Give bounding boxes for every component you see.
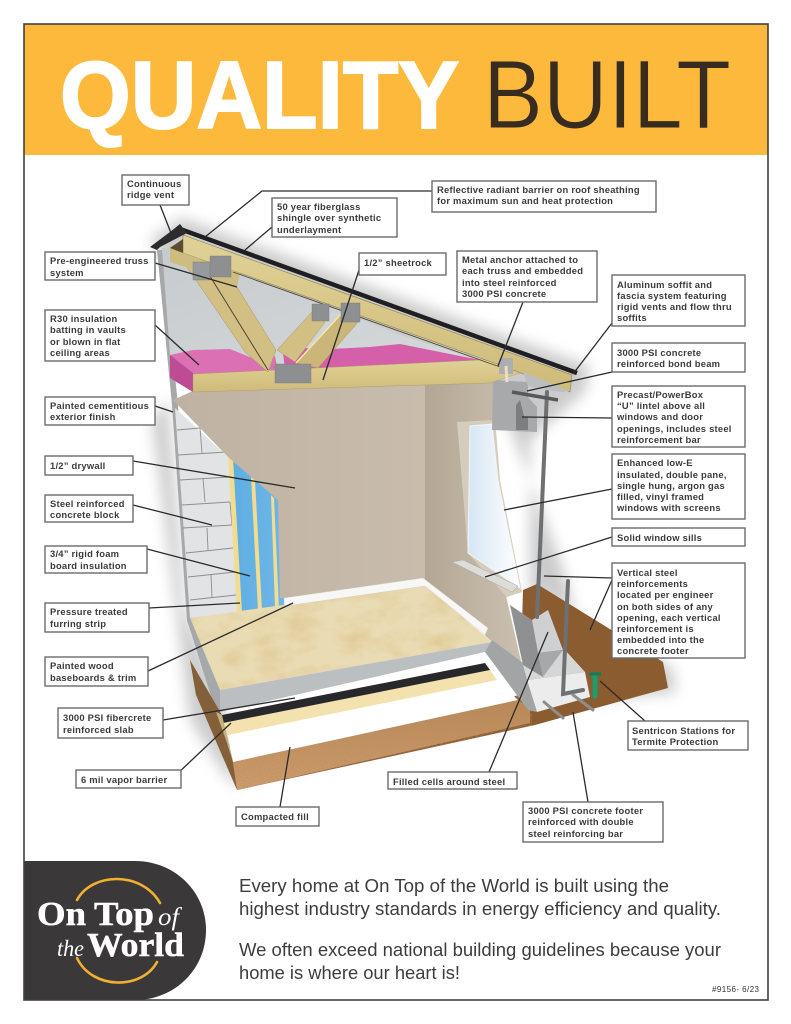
callout: vertical steel: reinforcements bbox=[617, 578, 688, 589]
callout: soffit: rigid vents and flow thru bbox=[617, 301, 732, 312]
callout: bond beam: reinforced bond beam bbox=[617, 358, 720, 369]
callout: shingle: 50 year fiberglass bbox=[277, 201, 361, 212]
ground right bbox=[233, 584, 668, 790]
cream layer bbox=[223, 670, 497, 735]
callout: bond beam bbox=[612, 343, 745, 372]
callout: baseboards: Painted wood bbox=[50, 660, 114, 671]
callout: shingle: shingle over synthetic bbox=[277, 212, 381, 223]
callout: foam bbox=[45, 546, 147, 573]
callout: sheetrock: 1/2” sheetrock bbox=[364, 257, 433, 268]
form number: #9156- 6/23 bbox=[712, 985, 760, 994]
callout: termite: Sentricon Stations for bbox=[632, 725, 735, 736]
callout: shingle bbox=[272, 198, 397, 237]
callout: vapor barrier: 6 mil vapor barrier bbox=[81, 774, 167, 785]
callout: lintel: “U” lintel above all bbox=[617, 400, 705, 411]
callout: lintel: reinforcement bar bbox=[617, 434, 701, 445]
roof shingle line bbox=[180, 229, 577, 373]
metal anchor bbox=[499, 358, 513, 382]
callout: soffit: soffits bbox=[617, 312, 647, 323]
callout: furring bbox=[45, 603, 149, 632]
compacted sand face bbox=[233, 700, 530, 790]
back wall drywall bbox=[173, 383, 428, 598]
callout: drywall bbox=[45, 456, 133, 475]
callout: r30 bbox=[45, 310, 155, 361]
callout: ridge vent: Continuous bbox=[127, 178, 181, 189]
rebar rods bbox=[537, 392, 593, 718]
u lintel bbox=[492, 380, 558, 432]
callout: furring: furring strip bbox=[50, 618, 106, 629]
callout: soffit bbox=[612, 275, 745, 326]
footer block bbox=[485, 597, 590, 712]
callout: cementitious bbox=[45, 397, 155, 425]
vapor barrier bbox=[222, 663, 490, 723]
truss plates bbox=[193, 256, 360, 383]
callout: baseboards bbox=[45, 657, 148, 686]
callout: footer: reinforced with double bbox=[528, 816, 634, 827]
slab side bbox=[187, 618, 220, 712]
callout: vertical steel: located per engineer bbox=[617, 589, 714, 600]
callout: windows: filled, vinyl framed bbox=[617, 491, 704, 502]
body copy bbox=[239, 876, 721, 983]
truss top chord bbox=[170, 235, 572, 392]
callout: block bbox=[45, 495, 133, 522]
callout: truss: system bbox=[50, 267, 84, 278]
exterior finish strip bbox=[157, 250, 222, 712]
callout: r30: R30 insulation bbox=[50, 313, 117, 324]
callout: ridge vent: ridge vent bbox=[127, 189, 174, 200]
baseboard trim bbox=[284, 578, 488, 635]
callout: radiant barrier: Reflective radiant barrier on roof sheathing bbox=[437, 184, 640, 195]
callout: r30: or blown in flat bbox=[50, 336, 120, 347]
soft shadow halo bbox=[150, 218, 676, 790]
callout: vertical steel: reinforcement is bbox=[617, 623, 694, 634]
rigid foam insulation bbox=[228, 457, 284, 612]
callout: footer: 3000 PSI concrete footer bbox=[528, 805, 643, 816]
callout: bond beam: 3000 PSI concrete bbox=[617, 347, 701, 358]
callout: windows: single hung, argon gas bbox=[617, 480, 725, 491]
cutaway house illustration bbox=[150, 218, 676, 792]
logo panel bbox=[24, 861, 206, 1000]
concrete block wall bbox=[175, 408, 238, 618]
callout: radiant barrier: for maximum sun and heat protection bbox=[437, 195, 613, 206]
soil layers bbox=[190, 584, 668, 792]
callout: compacted fill: Compacted fill bbox=[241, 811, 309, 822]
callout: ridge vent bbox=[122, 175, 189, 205]
callout: r30: batting in vaults bbox=[50, 324, 126, 335]
callout: metal anchor: 3000 PSI concrete bbox=[462, 288, 546, 299]
logo wordmark: On bbox=[37, 896, 86, 933]
window bbox=[468, 424, 520, 588]
side wall bbox=[425, 382, 522, 662]
logo wordmark: of bbox=[158, 904, 182, 931]
callout: windows bbox=[612, 454, 745, 519]
callout: truss bbox=[45, 252, 155, 280]
callout: lintel: Precast/PowerBox bbox=[617, 389, 704, 400]
callout: vertical steel: embedded into the bbox=[617, 634, 704, 645]
concrete block stem bbox=[510, 605, 563, 677]
callout: block: Steel reinforced bbox=[50, 498, 125, 509]
soffit bbox=[523, 372, 570, 392]
callout: vapor barrier bbox=[76, 770, 181, 788]
callout: filled cells: Filled cells around steel bbox=[393, 776, 505, 787]
callout: sills: Solid window sills bbox=[617, 532, 702, 543]
callout: windows: windows with screens bbox=[616, 502, 721, 513]
floor bbox=[190, 586, 492, 690]
callout: vertical steel: opening, each vertical bbox=[617, 612, 721, 623]
callout: vertical steel: on both sides of any bbox=[617, 601, 713, 612]
body copy: highest industry standards in energy efficiency and quality. bbox=[239, 899, 721, 919]
callout: lintel bbox=[612, 386, 745, 447]
callout: vertical steel: concrete footer bbox=[617, 645, 689, 656]
callout: lintel: windows and door bbox=[616, 411, 703, 422]
ridge vent bbox=[150, 224, 187, 250]
pink insulation bbox=[170, 344, 490, 392]
body copy: We often exceed national building guidelines because your bbox=[239, 940, 721, 960]
callout: metal anchor: each truss and embedded bbox=[462, 265, 583, 276]
callout: footer: steel reinforcing bar bbox=[528, 828, 623, 839]
callout: fibercrete bbox=[58, 708, 163, 738]
furring strips bbox=[228, 457, 279, 612]
body copy: home is where our heart is! bbox=[239, 963, 460, 983]
logo arcs bbox=[77, 879, 160, 983]
callout: drywall: 1/2” drywall bbox=[50, 460, 106, 471]
callout: metal anchor bbox=[457, 251, 597, 302]
logo wordmark: the bbox=[57, 936, 84, 961]
soil side bbox=[190, 660, 237, 790]
callout: sheetrock bbox=[359, 253, 446, 275]
callout: block: concrete block bbox=[50, 509, 120, 520]
title: quality: QUALITY bbox=[60, 42, 459, 149]
callout: termite bbox=[628, 721, 748, 750]
body copy: Every home at On Top of the World is built using the bbox=[239, 876, 669, 896]
callout: foam: board insulation bbox=[50, 560, 127, 571]
callout: compacted fill bbox=[236, 807, 319, 826]
compacted fill white layer bbox=[228, 680, 518, 762]
truss bottom chord bbox=[193, 359, 523, 392]
logo wordmark: Top bbox=[94, 896, 154, 933]
callout: lintel: openings, includes steel bbox=[617, 423, 732, 434]
callout: vertical steel bbox=[612, 563, 745, 658]
window sill bbox=[452, 560, 518, 592]
gable cavity bbox=[162, 248, 495, 385]
callout: metal anchor: into steel reinforced bbox=[462, 277, 557, 288]
callout: windows: Enhanced low-E bbox=[617, 457, 693, 468]
callout: metal anchor: Metal anchor attached to bbox=[462, 254, 578, 265]
callout: vertical steel: Vertical steel bbox=[617, 567, 678, 578]
callout: filled cells bbox=[388, 772, 517, 789]
callout: sills bbox=[612, 528, 745, 546]
callout: termite: Termite Protection bbox=[632, 736, 718, 747]
truss webs bbox=[187, 260, 360, 372]
logo wordmark: World bbox=[87, 927, 184, 964]
window reveal bbox=[455, 418, 522, 597]
callout: shingle: underlayment bbox=[277, 224, 341, 235]
logo wordmark bbox=[37, 896, 184, 964]
slab left wood strip bbox=[216, 712, 233, 762]
callout: foam: 3/4” rigid foam bbox=[50, 548, 119, 559]
header banner bbox=[24, 24, 768, 155]
slab edge bbox=[220, 642, 492, 712]
callout leaders bbox=[133, 191, 645, 807]
callout: r30: ceiling areas bbox=[50, 347, 110, 358]
callout: footer bbox=[523, 802, 663, 842]
callout: fibercrete: reinforced slab bbox=[63, 724, 134, 735]
title: built: BUILT bbox=[483, 40, 731, 149]
callout: fibercrete: 3000 PSI fibercrete bbox=[63, 712, 151, 723]
callout: windows: insulated, double pane, bbox=[617, 469, 727, 480]
callout: radiant barrier bbox=[432, 181, 656, 212]
callout: furring: Pressure treated bbox=[50, 606, 128, 617]
callout: baseboards: baseboards & trim bbox=[50, 672, 136, 683]
termite station bbox=[589, 674, 601, 696]
callout: truss: Pre-engineered truss bbox=[50, 255, 149, 266]
callout: soffit: Aluminum soffit and bbox=[617, 279, 712, 290]
callout: cementitious: Painted cementitious bbox=[50, 400, 149, 411]
callout: soffit: fascia system featuring bbox=[617, 290, 727, 301]
callout: cementitious: exterior finish bbox=[50, 411, 116, 422]
